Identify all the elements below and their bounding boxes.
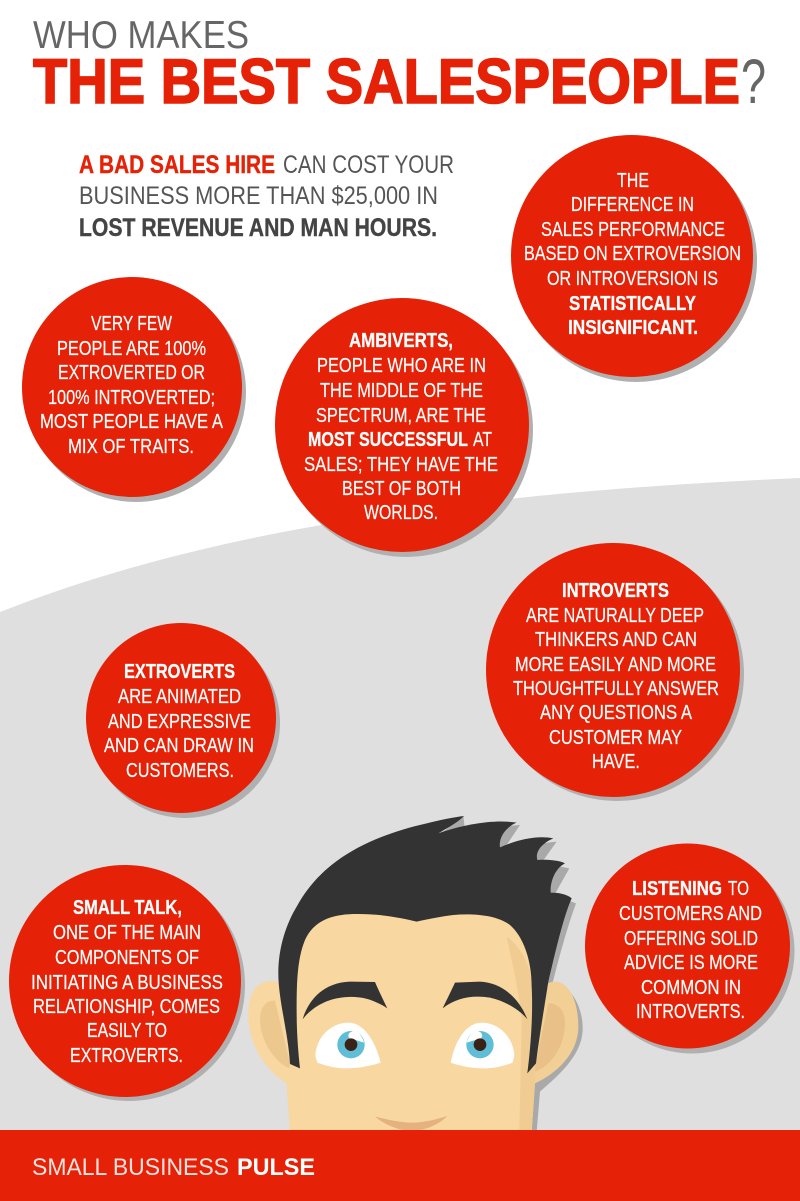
bubble: mix of traits: MOST PEOPLE HAVE A	[40, 411, 224, 433]
bubble: listening: OFFERING SOLID	[624, 928, 758, 950]
intro text: A BAD SALES HIRE	[79, 151, 275, 179]
bubble: extroverts: CUSTOMERS.	[126, 760, 234, 782]
bubble: small talk: RELATIONSHIP, COMES	[33, 996, 220, 1018]
bubble: statistically insignificant: THE	[617, 170, 649, 192]
bubble: statistically insignificant: OR INTROVERSION IS	[547, 268, 718, 290]
intro text: BUSINESS MORE THAN $25,000 IN	[79, 182, 438, 210]
bubble: statistically insignificant: STATISTICALLY	[569, 293, 697, 315]
bubble: listening	[585, 844, 794, 1054]
bubble: mix of traits: MIX OF TRAITS.	[68, 436, 194, 458]
bubble: statistically insignificant: DIFFERENCE IN	[571, 194, 694, 216]
bubble: mix of traits: PEOPLE ARE 100%	[57, 338, 206, 360]
bubble: mix of traits: VERY FEW	[91, 313, 172, 335]
bubble: mix of traits: 100% INTROVERTED;	[48, 387, 215, 409]
bubble: introverts: INTROVERTS	[562, 580, 669, 602]
bubble: small talk: INITIATING A BUSINESS	[31, 972, 223, 994]
bubble: listening: LISTENING	[632, 878, 722, 900]
bubble: ambiverts: BEST OF BOTH	[342, 478, 461, 500]
bubble: statistically insignificant: SALES PERFORMANCE	[541, 219, 725, 241]
bubble: statistically insignificant: BASED ON EXTROVERSION	[524, 243, 741, 265]
bubble: ambiverts: AMBIVERTS,	[349, 330, 453, 352]
bubble: ambiverts: MOST SUCCESSFUL	[308, 429, 468, 451]
bubble: introverts	[486, 543, 744, 801]
bubble: introverts: ANY QUESTIONS A	[540, 702, 693, 724]
bubble: ambiverts: WORLDS.	[364, 502, 438, 524]
bubble: mix of traits	[22, 277, 246, 502]
bubble: extroverts: AND EXPRESSIVE	[108, 711, 251, 733]
bubble: small talk: EASILY TO	[87, 1020, 167, 1042]
nose	[375, 1116, 447, 1131]
bubble: small talk: ONE OF THE MAIN	[53, 922, 201, 944]
bubble: introverts: THINKERS AND CAN	[535, 629, 697, 651]
bubble: ambiverts: SALES; THEY HAVE THE	[304, 454, 498, 476]
bubble: introverts: THOUGHTFULLY ANSWER	[513, 678, 719, 700]
intro text: LOST REVENUE AND MAN HOURS.	[79, 214, 437, 242]
bubble: extroverts: ARE ANIMATED	[118, 686, 241, 708]
bubble: listening: INTROVERTS.	[636, 1001, 745, 1023]
bubble: introverts: MORE EASILY AND MORE	[515, 654, 716, 676]
bubble: ambiverts	[275, 298, 533, 557]
bubble: ambiverts: PEOPLE WHO ARE IN	[317, 355, 486, 377]
footer bar	[0, 1130, 800, 1201]
footer text: SMALL BUSINESS	[32, 1154, 229, 1181]
title	[33, 14, 766, 117]
bubble: ambiverts: THE MIDDLE OF THE	[320, 380, 483, 402]
bubble: statistically insignificant	[511, 135, 757, 382]
bubble: ambiverts: SPECTRUM, ARE THE	[316, 405, 486, 427]
title: WHO MAKES	[33, 14, 249, 57]
bubble: extroverts: EXTROVERTS	[124, 661, 235, 683]
bubble: small talk: EXTROVERTS.	[70, 1045, 183, 1067]
bubble: listening: TO	[728, 878, 749, 900]
right eyebrow	[443, 982, 527, 1019]
title: ?	[741, 47, 766, 117]
bubble: small talk: COMPONENTS OF	[55, 947, 199, 969]
bubble: extroverts: AND CAN DRAW IN	[104, 735, 254, 757]
illustration: face	[248, 816, 583, 1132]
bubble: introverts: CUSTOMER MAY	[549, 727, 682, 749]
bubble: ambiverts: AT	[473, 429, 492, 451]
bubble: listening: CUSTOMERS AND	[619, 903, 762, 925]
left eyebrow	[303, 982, 387, 1019]
intro text	[79, 151, 454, 242]
footer text: PULSE	[237, 1154, 315, 1181]
left eye	[315, 1023, 381, 1068]
right eye	[451, 1023, 514, 1068]
hair	[278, 816, 572, 1073]
bubble: introverts: ARE NATURALLY DEEP	[526, 605, 704, 627]
intro text: CAN COST YOUR	[283, 151, 454, 179]
bubble: statistically insignificant: INSIGNIFICANT.	[568, 317, 698, 339]
bubble: small talk: SMALL TALK,	[73, 897, 182, 919]
bubble: mix of traits: EXTROVERTED OR	[58, 362, 205, 384]
bubble: small talk	[9, 865, 245, 1101]
grey curved background	[0, 478, 800, 1201]
bubble: introverts: HAVE.	[592, 751, 640, 773]
bubble: extroverts	[86, 623, 280, 818]
bubble: listening: COMMON IN	[641, 977, 741, 999]
bubble: listening: ADVICE IS MORE	[624, 952, 758, 974]
